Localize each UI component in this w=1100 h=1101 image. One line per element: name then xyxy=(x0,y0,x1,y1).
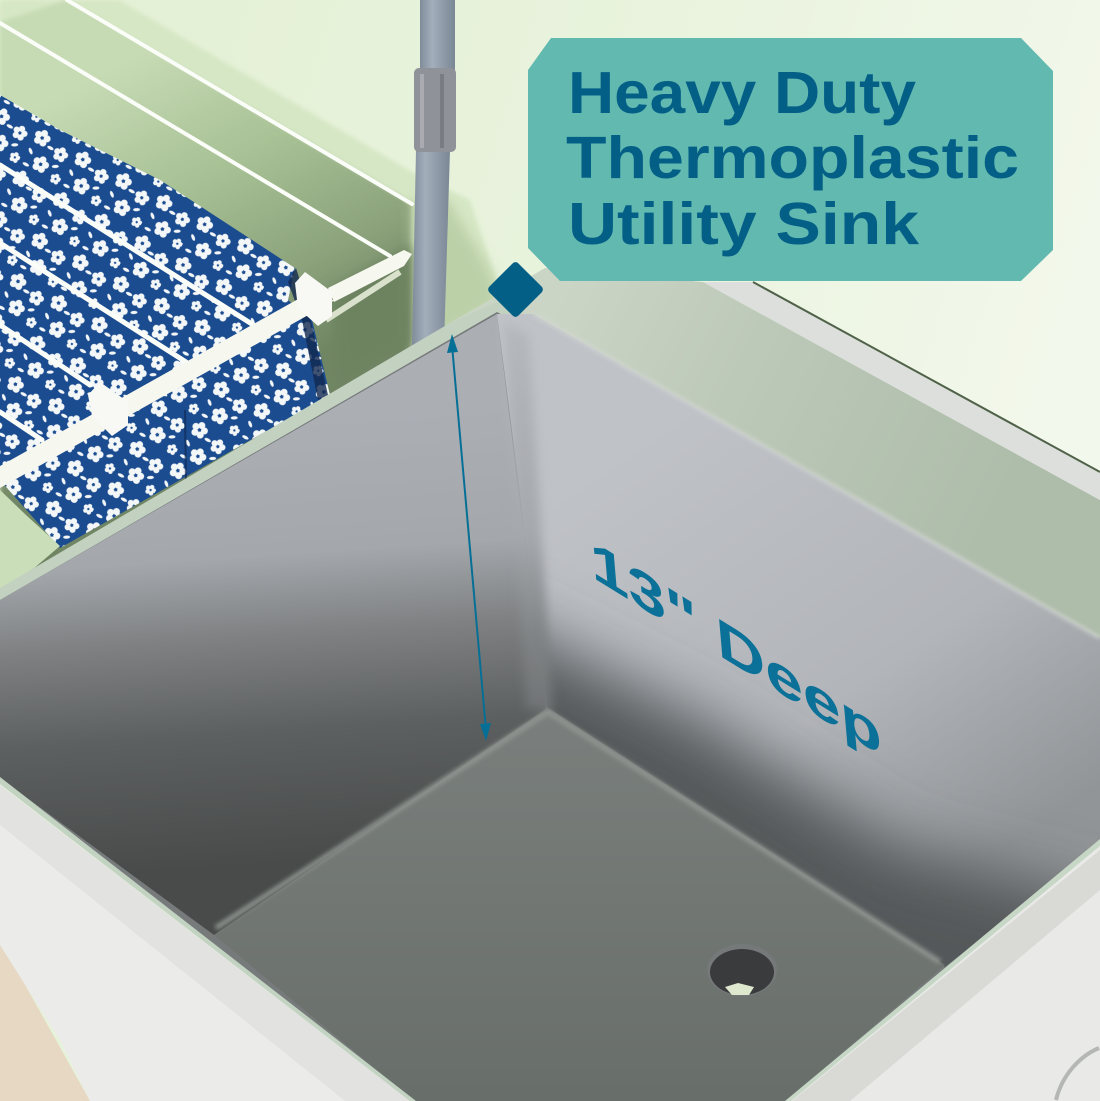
sink back rim xyxy=(450,268,1100,650)
title text: Thermoplastic xyxy=(566,125,1019,191)
blue floral cloth xyxy=(0,95,330,548)
title text xyxy=(566,60,1019,257)
title text: Heavy Duty xyxy=(568,60,916,126)
sink basin left wall xyxy=(0,314,545,935)
rack front bar with clips xyxy=(0,250,412,595)
support pole xyxy=(412,0,456,345)
floor edge highlights xyxy=(216,712,940,962)
right wall shadow xyxy=(544,599,1074,967)
sink basin floor xyxy=(214,708,945,1101)
diamond marker xyxy=(487,261,544,318)
corner pillar xyxy=(504,322,553,712)
drying rack wires xyxy=(0,0,412,256)
depth arrow xyxy=(447,334,491,741)
rim inner edge highlight xyxy=(533,314,1100,638)
sink basin right wall xyxy=(497,314,1100,967)
drain hole xyxy=(707,944,777,996)
laundry shelf backdrop xyxy=(0,0,500,600)
cloth fold shadow xyxy=(185,268,328,485)
title text: Utility Sink xyxy=(568,191,919,257)
callout panel: product title xyxy=(528,38,1053,281)
sink front right wall xyxy=(785,839,1100,1101)
wooden floor xyxy=(0,940,90,1101)
sink front left wall xyxy=(0,777,416,1101)
rack rods over cloth xyxy=(0,165,255,440)
sink left rim xyxy=(0,298,530,610)
depth label: 13" Deep xyxy=(588,526,884,769)
basin base xyxy=(0,312,1100,1101)
